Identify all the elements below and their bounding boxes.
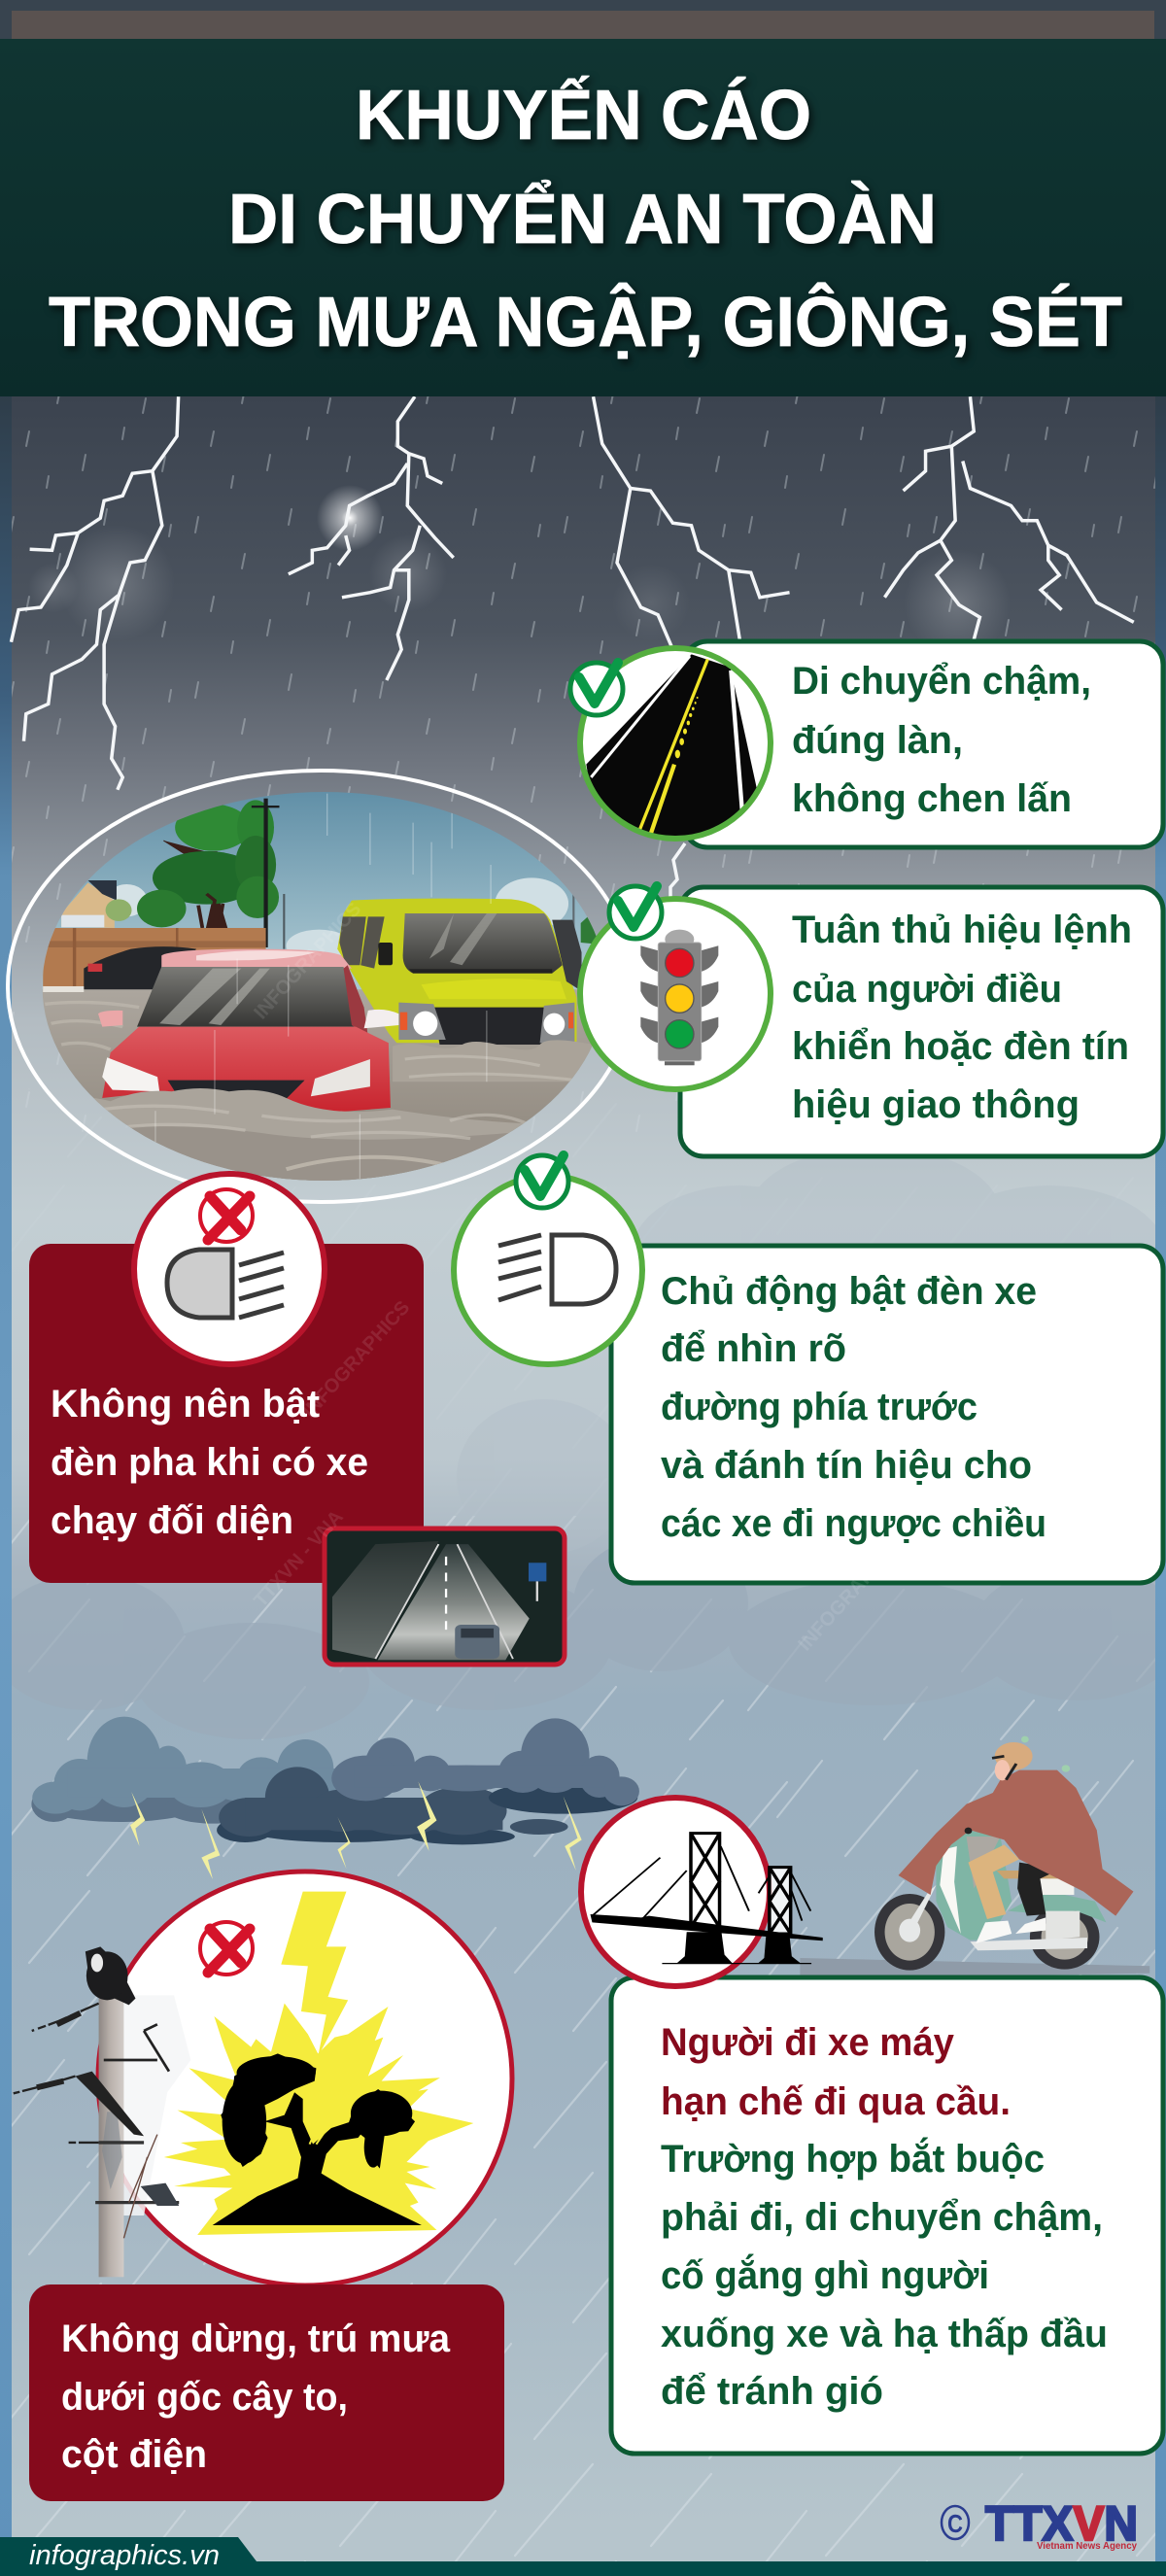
red panel text: dưới gốc cây to, [61,2376,348,2419]
motorbike advice text: xuống xe và hạ thấp đầu [661,2313,1108,2355]
panel 2 text: của người điều [792,968,1062,1011]
motorbike advice text: Trường hợp bắt buộc [661,2136,1045,2181]
website label: infographics.vn [29,2540,220,2571]
icon: suspension bridge [581,1798,823,1986]
panel 3 text [661,1270,1046,1545]
panel 2 text [792,909,1132,1126]
agency wordmark: TTXVN [985,2496,1138,2551]
panel text white [51,1383,368,1542]
copyright symbol [942,2506,969,2539]
panel: traffic signals [680,887,1163,1156]
panel text white: chạy đối diện [51,1499,293,1542]
top strip [0,0,1166,39]
panel 3 text: Chủ động bật đèn xe [661,1270,1037,1313]
panel: slow driving [684,641,1163,847]
panel 2 text: khiển hoặc đèn tín [792,1025,1129,1068]
yellow burst [164,2004,473,2235]
panel 2 text: hiệu giao thông [792,1083,1080,1126]
storm clouds [31,1717,639,1879]
watermarks: INFOGRAPHICS [298,1297,414,1422]
panel: motorbike advice [611,1977,1163,2454]
panel text white: đèn pha khi có xe [51,1441,368,1484]
icon: cross mark tree [200,1922,253,1975]
red panel text [61,2318,451,2476]
agency tagline: Vietnam News Agency [1037,2541,1137,2552]
icon: road [580,648,771,839]
icon: check mark headlight [516,1155,568,1208]
TTXVN logo [942,2496,1138,2552]
flooded street scene [8,771,634,1202]
panel 3 text: đường phía trước [661,1386,977,1428]
panel 3 text: và đánh tín hiệu cho [661,1444,1032,1487]
icon: check mark traffic light [609,886,662,939]
lightning bolts [11,396,1134,900]
footer bar [0,2537,1166,2576]
motorbike advice text: phải đi, di chuyển chậm, [661,2196,1103,2239]
sparks on trunk [310,2118,329,2145]
title line 3: TRONG MƯA NGẬP, GIÔNG, SÉT [49,283,1122,361]
icon: traffic light [580,899,771,1089]
icon: lightning striking tree [98,1872,512,2285]
watermarks [250,899,909,1655]
electric pole [14,1946,190,2277]
title line 1: KHUYẾN CÁO [356,76,811,155]
panel 1 text: không chen lấn [792,777,1072,820]
panel 1 text: Di chuyển chậm, [792,660,1091,703]
icon: low-beam headlight [454,1176,642,1364]
motorbike advice text: Người đi xe máy [661,2021,955,2064]
panel: headlights on [611,1246,1163,1583]
small lightning under clouds [130,1781,582,1879]
panel 1 text: đúng làn, [792,719,963,762]
title line 2: DI CHUYỂN AN TOÀN [228,180,937,258]
motorbike advice text: cố gắng ghì người [661,2252,989,2297]
panel text white: Không nên bật [51,1383,320,1425]
title banner [0,39,1166,396]
red panel text: cột điện [61,2433,207,2476]
night road photo [325,1528,565,1665]
icon: check mark road [570,663,623,715]
panel: no high beam [29,1244,424,1583]
copyright symbol: C [947,2509,963,2538]
watermarks: INFOGRAPHICS [794,1530,909,1655]
watermarks: TTXVN - VNA [250,1506,348,1611]
motorbike rider in poncho [800,1736,1149,1977]
panel 2 text: Tuân thủ hiệu lệnh [792,909,1132,951]
motorbike advice text [661,2021,1108,2413]
motorbike advice text: để tránh gió [661,2370,883,2413]
icon: cross mark high beam [200,1189,253,1242]
tree [137,800,279,928]
lightning bolt [281,1892,348,2057]
panel 3 text: để nhìn rõ [661,1327,846,1370]
panel: no shelter under tree or pole [29,2284,504,2501]
tree silhouette [213,2053,422,2225]
panel 1 text [792,660,1091,820]
icon: high-beam headlight [134,1174,325,1364]
red panel text: Không dừng, trú mưa [61,2318,451,2360]
motorbike advice text: hạn chế đi qua cầu. [661,2080,1011,2123]
panel 3 text: các xe đi ngược chiều [661,1502,1046,1545]
watermarks: INFOGRAPHICS [250,899,365,1023]
